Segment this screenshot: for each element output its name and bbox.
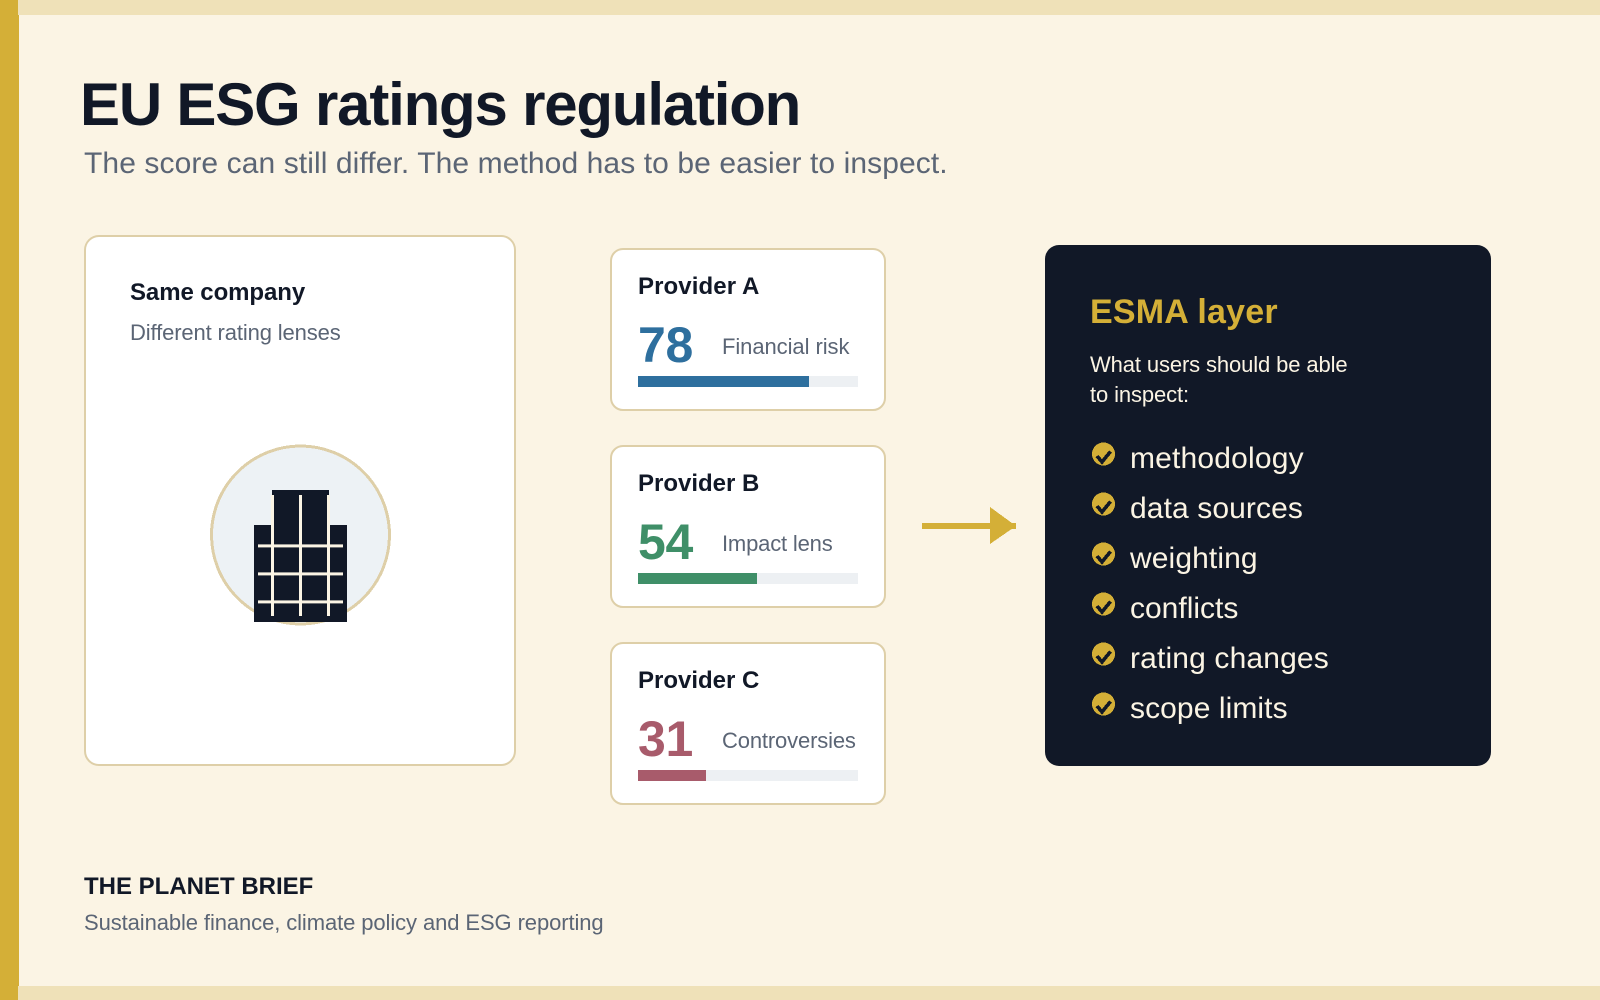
panel: ESMA layer — [1045, 245, 1491, 766]
provider name B: Provider B — [638, 470, 759, 497]
provider name C: Provider C — [638, 667, 759, 694]
lens label A: Financial risk — [722, 334, 849, 359]
panel: same company — [84, 235, 516, 766]
icon: office building — [210, 444, 391, 626]
arrow — [922, 507, 1016, 544]
ESMA intro text: to inspect: — [1090, 382, 1189, 407]
score bar B — [638, 573, 858, 584]
lens label B: Impact lens — [722, 531, 833, 556]
item: conflicts: conflicts — [1130, 592, 1238, 625]
score 54: 54 — [638, 514, 693, 570]
score 78: 78 — [638, 317, 693, 373]
item: scope limits: scope limits — [1130, 692, 1288, 725]
score 31: 31 — [638, 711, 693, 767]
title: EU ESG ratings regulation — [80, 71, 800, 138]
ESMA heading: ESMA layer — [1090, 293, 1278, 331]
score bar C — [638, 770, 858, 781]
item: rating changes: rating changes — [1130, 642, 1329, 675]
footer brand: THE PLANET BRIEF — [84, 873, 313, 900]
provider name A: Provider A — [638, 273, 759, 300]
card: provider A — [610, 248, 886, 411]
subtitle: The score can still differ. The method has to be easier to inspect. — [84, 147, 948, 180]
score bar A — [638, 376, 858, 387]
ESMA intro text: What users should be able — [1090, 352, 1348, 377]
item: data sources: data sources — [1130, 492, 1303, 525]
card: provider C — [610, 642, 886, 805]
item: weighting: weighting — [1130, 542, 1258, 575]
footer descriptor: Sustainable finance, climate policy and ESG reporting — [84, 910, 604, 935]
panel subheading: Different rating lenses — [130, 320, 341, 345]
lens label C: Controversies — [722, 728, 856, 753]
panel heading: Same company — [130, 279, 305, 306]
ESMA intro text — [1090, 352, 1348, 407]
card: provider B — [610, 445, 886, 608]
item: methodology: methodology — [1130, 442, 1304, 475]
